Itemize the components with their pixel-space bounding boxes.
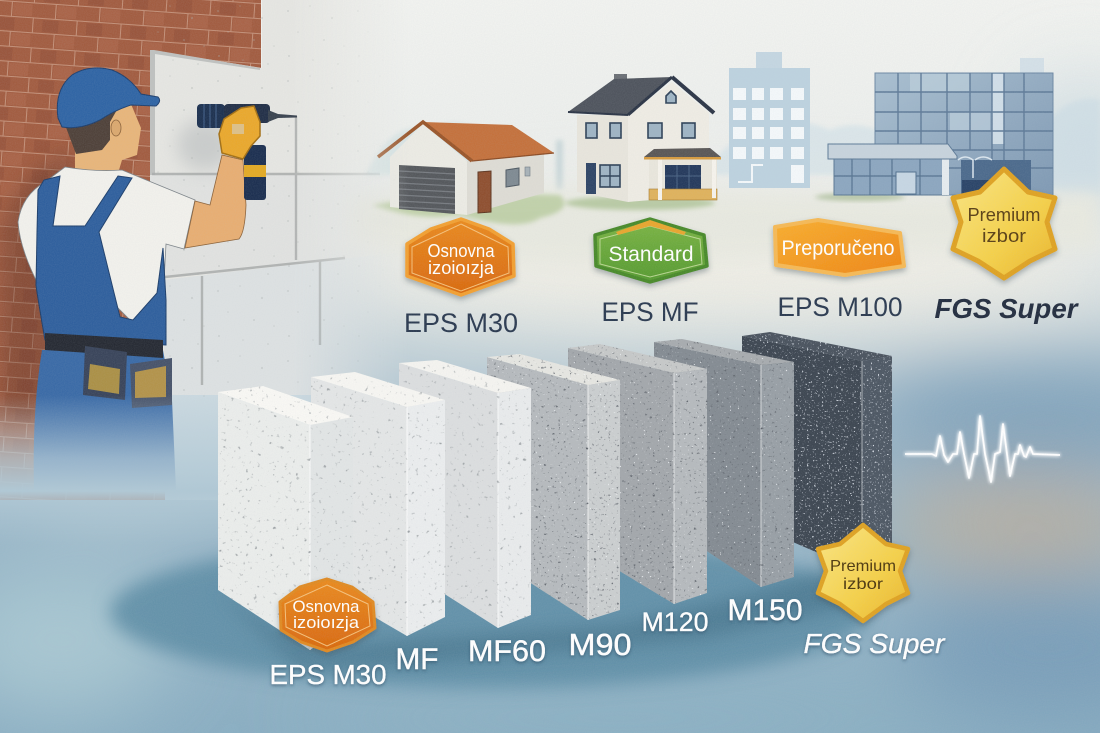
label: M90: M90 [568,627,632,662]
badge: Premium izbor (bottom star): Premium [830,558,896,575]
worker [18,68,297,490]
badge: Standard: Standard [608,243,694,266]
badge: Osnovna izolacija (top): Osnovna [428,241,495,261]
label: EPS MF (top): EPS MF [602,297,698,327]
worker trousers [34,350,176,490]
badge: Premium izbor (bottom star) [818,525,908,621]
shadow below panels [215,548,895,668]
worker hair [64,108,118,154]
two-storey house [568,74,721,202]
distant hills and skyline [365,99,1100,195]
badge: Preporučeno [775,220,904,275]
badge: Premium izbor (top star): Premium [968,205,1040,225]
ground with grass [350,190,1100,265]
label: FGS Super (top): FGS Super [934,293,1080,324]
badge: Preporučeno: Preporučeno [782,237,894,260]
badge: Osnovna izolacija (bottom): Osnovna [292,597,360,616]
tower building [729,52,810,188]
label: M150: M150 [728,594,802,627]
badge: Premium izbor (top star) [953,169,1055,278]
worker arm [185,155,246,248]
badge: Premium izbor (bottom star): izbor [843,576,884,593]
label: MF: MF [396,643,438,676]
drill [197,104,297,200]
badge: Osnovna izolacija (bottom): izoioızja [293,613,360,632]
panel: FGS Super [742,332,892,572]
panel: M150 [654,339,794,587]
label: FGS Super (bottom): FGS Super [804,628,946,659]
worker shirt [18,167,195,325]
badge: Standard [595,219,707,282]
worker overalls [36,176,166,345]
badge: Premium izbor (top star): izbor [982,226,1026,246]
garage house [378,122,554,215]
brick wall [0,0,261,500]
heartbeat line [905,416,1060,482]
label: EPS M30 (bottom): EPS M30 [270,659,386,690]
badge: Osnovna izolacija (top): izoioızja [428,258,495,278]
office building [828,58,1053,195]
panel: M90 [487,354,620,620]
panel: M120 [568,344,707,604]
label: M120: M120 [642,607,708,637]
worker belt [45,333,163,358]
insulation panels on wall [150,0,420,500]
badge: Osnovna izolacija (bottom) [280,579,375,651]
tool pouches [83,346,172,408]
glove [219,106,260,159]
label: MF60: MF60 [468,635,546,668]
worker ear [111,120,121,136]
panel: MF [311,372,445,636]
fog over wall and worker base [0,395,270,545]
panel: MF60 [399,360,531,628]
label: EPS M100: EPS M100 [778,292,902,322]
panel: EPS M30 [218,386,353,650]
badge: Osnovna izolacija (top) [407,219,514,295]
worker cap [57,68,160,128]
worker neck and face [75,104,141,174]
label: EPS M30 (top): EPS M30 [404,308,518,338]
